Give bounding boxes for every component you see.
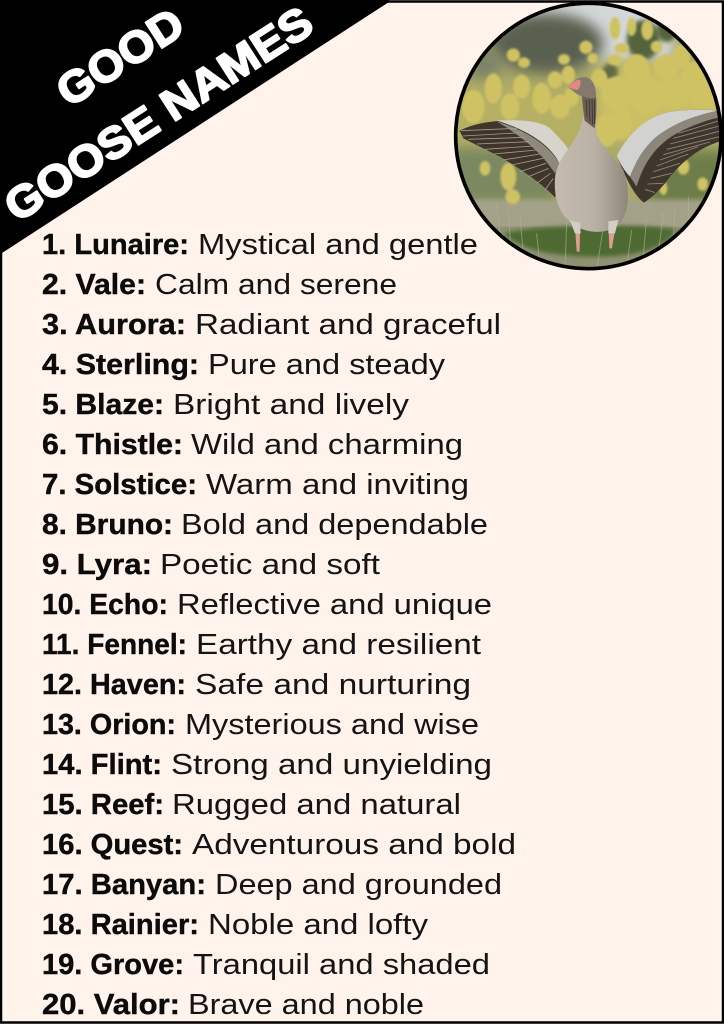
name 3: Radiant and graceful [195, 309, 501, 341]
name 9: 9. Lyra: [42, 549, 152, 581]
name 15: 15. Reef: [42, 789, 164, 821]
grass blades [497, 197, 688, 270]
name 2 [42, 269, 397, 301]
name 5: Bright and lively [173, 389, 410, 421]
name 20 [42, 989, 424, 1021]
name 7 [42, 469, 469, 501]
goose head [568, 77, 596, 98]
name 16: 16. Quest: [42, 829, 183, 861]
list of twenty goose names [42, 229, 516, 1021]
name 8: Bold and dependable [181, 509, 488, 541]
name 4: Pure and steady [208, 349, 446, 381]
name 4: 4. Sterling: [42, 349, 199, 381]
name 1: Mystical and gentle [198, 229, 478, 261]
name 18: Noble and lofty [208, 909, 429, 941]
name 17 [42, 869, 502, 901]
name 16: Adventurous and bold [192, 829, 516, 861]
name 2: Calm and serene [155, 269, 397, 301]
name 18 [42, 909, 429, 941]
yellow flowers [462, 17, 717, 204]
name 10: Reflective and unique [177, 589, 492, 621]
name 6: Wild and charming [191, 429, 463, 461]
name 8 [42, 509, 488, 541]
name 17: Deep and grounded [215, 869, 502, 901]
name 11 [42, 629, 481, 661]
goose body [555, 77, 628, 252]
name 3: 3. Aurora: [42, 309, 186, 341]
name 4 [42, 349, 446, 381]
name 14: 14. Flint: [42, 749, 162, 781]
name 11: Earthy and resilient [196, 629, 481, 661]
photo backdrop [458, 5, 720, 267]
name 8: 8. Bruno: [42, 509, 173, 541]
name 19: 19. Grove: [42, 949, 184, 981]
name 13: 13. Orion: [42, 709, 176, 741]
name 15: Rugged and natural [172, 789, 461, 821]
name 14: Strong and unyielding [171, 749, 492, 781]
name 15 [42, 789, 461, 821]
name 20: 20. Valor: [42, 989, 180, 1021]
name 17: 17. Banyan: [42, 869, 206, 901]
name 16 [42, 829, 516, 861]
title: line two: GOOSE NAMES [0, 0, 322, 231]
name 6 [42, 429, 463, 461]
name 20: Brave and noble [188, 989, 424, 1021]
name 3 [42, 309, 501, 341]
name 5: 5. Blaze: [42, 389, 164, 421]
name 7: 7. Solstice: [42, 469, 197, 501]
photo: goose with spread wings in a circle [440, 0, 724, 280]
name 13: Mysterious and wise [185, 709, 479, 741]
goose beak [568, 80, 581, 90]
name 19: Tranquil and shaded [193, 949, 490, 981]
name 10: 10. Echo: [42, 589, 168, 621]
name 19 [42, 949, 490, 981]
name 14 [42, 749, 492, 781]
name 10 [42, 589, 492, 621]
name 5 [42, 389, 410, 421]
name 12: Safe and nurturing [195, 669, 471, 701]
name 9 [42, 549, 380, 581]
right wing [617, 110, 719, 203]
name 7: Warm and inviting [206, 469, 469, 501]
goose legs [575, 232, 615, 252]
photo frame [456, 3, 721, 269]
name 2: 2. Vale: [42, 269, 146, 301]
name 12: 12. Haven: [42, 669, 186, 701]
name 13 [42, 709, 479, 741]
name 1: 1. Lunaire: [42, 229, 189, 261]
title: line one: GOOD [48, 0, 193, 116]
title banner [0, 0, 389, 254]
left wing [459, 120, 569, 197]
name 11: 11. Fennel: [42, 629, 187, 661]
name 12 [42, 669, 471, 701]
name 6: 6. Thistle: [42, 429, 183, 461]
name 1 [42, 229, 478, 261]
name 9: Poetic and soft [160, 549, 380, 581]
name 18: 18. Rainier: [42, 909, 199, 941]
